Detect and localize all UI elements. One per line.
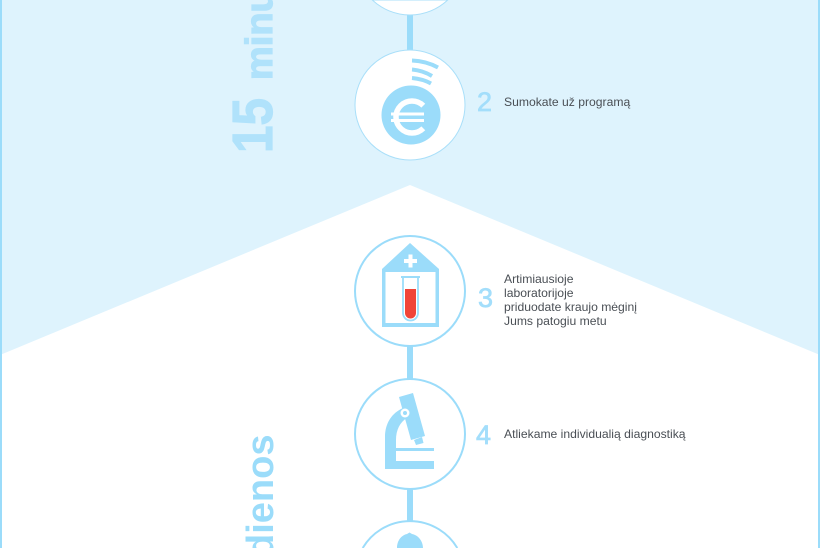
step 5 circle and icon bbox=[363, 521, 457, 548]
right border bbox=[818, 0, 820, 548]
icon: microscope bbox=[385, 393, 434, 469]
step 4: diagnostics bbox=[355, 379, 686, 489]
step 2: payment bbox=[355, 50, 630, 160]
panel: 15 minutes section bbox=[0, 0, 820, 355]
step 3 text: Jums patogiu metu bbox=[504, 314, 607, 328]
step 3 circle bbox=[355, 236, 465, 346]
icon: lab with test tube bbox=[382, 243, 439, 327]
icon: euro coin with signal bbox=[382, 60, 440, 144]
step 2 number: 2 bbox=[477, 87, 492, 117]
heading: 15 minutes bbox=[221, 0, 285, 153]
step 2 circle bbox=[355, 50, 465, 160]
step 4 text: Atliekame individualią diagnostiką bbox=[504, 427, 686, 441]
step 2 text: Sumokate už programą bbox=[504, 95, 630, 109]
left border bbox=[0, 0, 2, 548]
heading: 15 minutes: 15 bbox=[221, 98, 285, 153]
step 3: lab bbox=[355, 236, 640, 346]
step 3 text: laboratorijoje bbox=[504, 286, 574, 300]
step 4 number: 4 bbox=[476, 420, 491, 450]
step 3 number: 3 bbox=[478, 283, 493, 313]
step 3 text: priduodate kraujo mėginį bbox=[504, 300, 637, 314]
step 4 circle bbox=[355, 379, 465, 489]
step 3 text: Artimiausioje bbox=[504, 272, 574, 286]
step 1 circle bbox=[372, 0, 448, 15]
connector lines bbox=[407, 10, 413, 525]
